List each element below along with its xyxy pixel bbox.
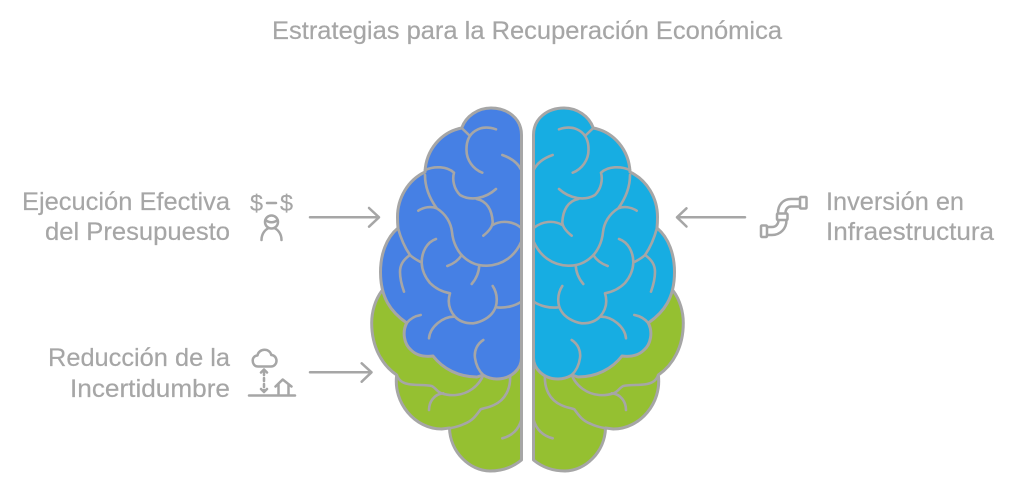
- label: Inversión en Infraestructura: Inversión en: [826, 188, 964, 216]
- label: Inversión en Infraestructura: Infraestructura: [826, 218, 994, 246]
- icon: budget person: $: [250, 190, 263, 216]
- blue lobe, right: [534, 108, 674, 379]
- label: Reducción de la Incertidumbre: Incertidumbre: [70, 375, 230, 403]
- title: Estrategias para la Recuperación Económica: [272, 17, 782, 45]
- right hemisphere: [534, 108, 683, 471]
- label: Ejecución Efectiva del Presupuesto: [22, 188, 230, 246]
- label: Reducción de la Incertidumbre: [48, 344, 230, 403]
- blue lobe, left: [380, 108, 522, 379]
- label: Reducción de la Incertidumbre: Reducción de la: [48, 344, 230, 372]
- blue lobe folds, left: [398, 128, 521, 375]
- green lobe, right: [534, 291, 683, 471]
- icon: cloud and house: [249, 350, 295, 396]
- left hemisphere: [372, 108, 522, 471]
- green lobe folds, right: [534, 375, 658, 438]
- green lobe, left: [372, 291, 522, 471]
- brain: [372, 108, 683, 471]
- icon: pipe: [761, 197, 806, 237]
- blue lobe folds, right: [534, 128, 657, 375]
- arrow: budget to brain: [310, 208, 379, 227]
- icon: budget person: $: [280, 190, 293, 216]
- green lobe folds, left: [397, 375, 521, 438]
- label: Ejecución Efectiva del Presupuesto: del Presupuesto: [45, 218, 230, 246]
- arrow: infrastructure to brain: [677, 208, 745, 226]
- arrow: uncertainty to brain: [310, 363, 372, 382]
- icon: budget person: [250, 190, 293, 240]
- label: Inversión en Infraestructura: [826, 188, 994, 246]
- label: Ejecución Efectiva del Presupuesto: Ejecución Efectiva: [22, 188, 230, 216]
